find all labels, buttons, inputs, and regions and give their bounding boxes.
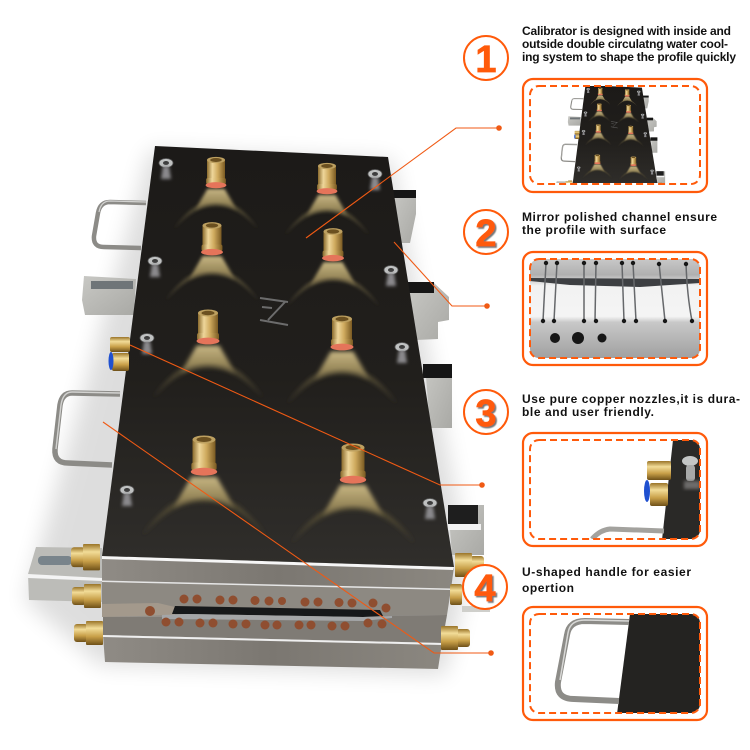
leader line 4 [103, 422, 494, 656]
feature 2 text: Mirror polished channel ensure [522, 210, 717, 224]
feature 3 photo card [523, 433, 707, 546]
leader line 3 [130, 345, 485, 488]
feature 2 photo card [523, 252, 707, 365]
feature 3 text: ble and user friendly. [522, 405, 654, 419]
feature 4 text: U-shaped handle for easier [522, 565, 691, 579]
feature 1 text: outside double circulatng water cool- [522, 37, 728, 51]
leader line 1 [306, 125, 502, 238]
feature 4 number badge [463, 565, 507, 610]
main product illustration: calibrator [28, 146, 490, 669]
feature 4 text: opertion [522, 581, 574, 595]
feature 1 text: Calibrator is designed with inside and [522, 24, 731, 38]
feature 2 number badge [464, 210, 508, 255]
leader line 2 [394, 242, 490, 309]
feature 3 number badge [464, 390, 508, 435]
feature 1 number badge: 1 [475, 39, 497, 81]
feature 4 photo card [523, 607, 707, 720]
feature 1 photo card [522, 78, 708, 194]
feature 4 number badge: 4 [474, 568, 496, 610]
feature 1 text: ing system to shape the profile quickly [522, 50, 736, 64]
feature 3 number badge: 3 [475, 393, 497, 435]
soft shadow behind product [25, 150, 470, 675]
feature 3 text: Use pure copper nozzles,it is dura- [522, 392, 740, 406]
feature 1 number badge [464, 36, 508, 81]
feature 2 number badge: 2 [475, 213, 497, 255]
feature 2 text: the profile with surface [522, 223, 666, 237]
